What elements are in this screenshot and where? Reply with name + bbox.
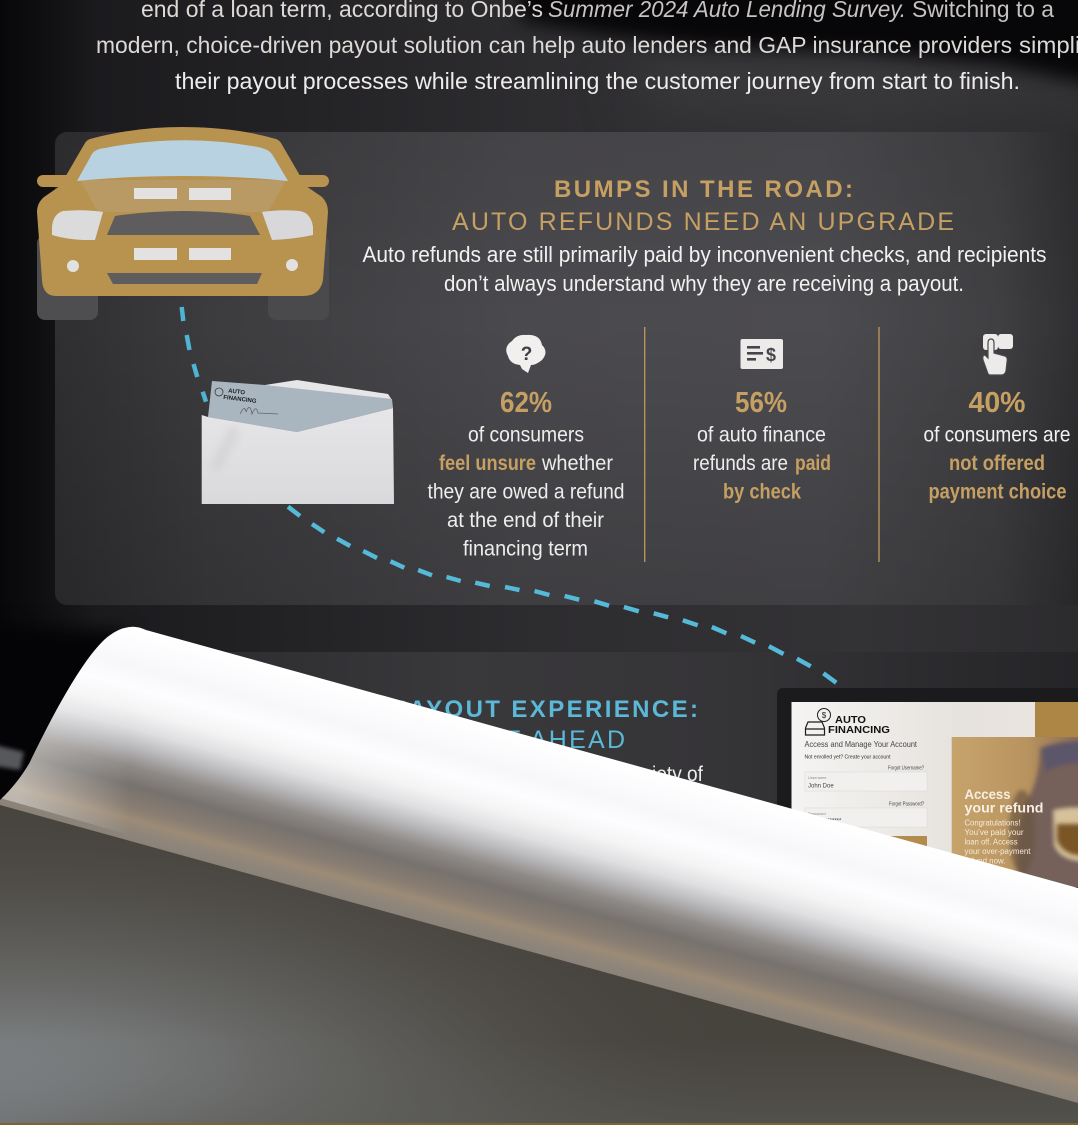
refund promo image: refund now. [964,856,1006,866]
icon: question thought bubble: ? [521,344,532,365]
section description: Auto refunds are still primarily paid by inconvenient checks, and recipients [362,242,1046,267]
refund promo image [952,737,1078,890]
payout description fragment: iety of [652,763,703,786]
stat: 62 percent: at the end of their [447,509,604,532]
login form: Forgot Username? [888,766,924,772]
refund promo image: You’ve paid your [964,828,1024,837]
left edge glare behind page curl [0,622,140,820]
login form: Username [808,775,827,780]
panel: bumps in the road background [55,132,1078,605]
login form: Password [808,811,826,816]
icon: hand pressing choice button [983,334,1013,375]
stat: 40 percent: 40% [968,387,1026,419]
icon: car front view [37,127,329,320]
login form: ******* [825,818,842,824]
refund promo image: Congratulations! [964,818,1020,828]
stat: 56 percent: of auto finance [697,424,826,446]
refund promo image: Access [964,787,1010,802]
stat: 62 percent [428,335,624,560]
stat: 62 percent: feel unsure [439,452,536,475]
icon: envelope with check: AUTO [228,388,246,396]
refund promo image: your over-payment [964,847,1031,856]
logo: auto financing: $ [822,711,827,720]
stat: 56 percent: refunds are [693,452,788,475]
heading: bumps in the road [452,176,954,236]
stat: 56 percent [693,339,831,504]
heading: payout experience: PAYOUT EXPERIENCE: [392,696,698,723]
icon: envelope with check [202,380,394,504]
icon: envelope with check: FINANCING [223,395,257,405]
section description: don’t always understand why they are receiving a payout. [444,271,964,296]
stat: 62 percent: whether [541,452,613,475]
stat: 56 percent: paid [795,452,831,475]
heading: bumps in the road: AUTO REFUNDS NEED AN UPGRADE [452,208,954,236]
stat dividers [644,327,880,562]
intro text [96,0,1078,94]
stat: 62 percent: 62% [500,387,552,419]
icon: check with dollar sign: $ [766,345,776,365]
stat: 62 percent: they are owed a refund [428,480,624,504]
login form: Access and Manage Your Account [804,740,918,749]
arrow: dashed route from car to envelope [182,307,206,402]
intro text: modern, choice-driven payout solution can help auto lenders and GAP insurance providers [96,32,1012,58]
stat: 56 percent: by check [723,480,801,504]
heading: payout experience: T AHEAD [505,726,625,754]
stat: 56 percent: 56% [735,387,787,419]
panel: payout experience background [55,652,1078,1125]
arrow: dashed route from envelope to monitor [288,507,836,683]
login form: John Doe [808,784,834,790]
logo: auto financing [806,708,890,736]
login form [804,740,927,860]
lower page area under curl [0,802,1078,1125]
logo: auto financing: AUTO [835,714,866,726]
stat: 40 percent [924,334,1070,504]
section description [362,242,1046,296]
logo: auto financing: FINANCING [828,724,890,736]
login form: Forgot Password? [889,802,924,808]
login form: Not enrolled yet? Create your account [804,754,891,760]
monitor mockup [777,688,1078,908]
icon: check with dollar sign [740,339,783,369]
heading: bumps in the road: BUMPS IN THE ROAD: [554,176,853,203]
refund promo image: your refund [964,800,1044,816]
refund promo image: loan off. Access [964,838,1018,846]
heading: payout experience [392,696,698,754]
intro text: their payout processes while streamlining the customer journey from start to finish. [175,68,1020,94]
icon: question thought bubble [506,335,546,373]
stat: 40 percent: not offered [949,452,1045,475]
stat: 62 percent: financing term [463,538,588,560]
stat: 62 percent: of consumers [468,424,584,446]
page curl [0,620,1078,1103]
